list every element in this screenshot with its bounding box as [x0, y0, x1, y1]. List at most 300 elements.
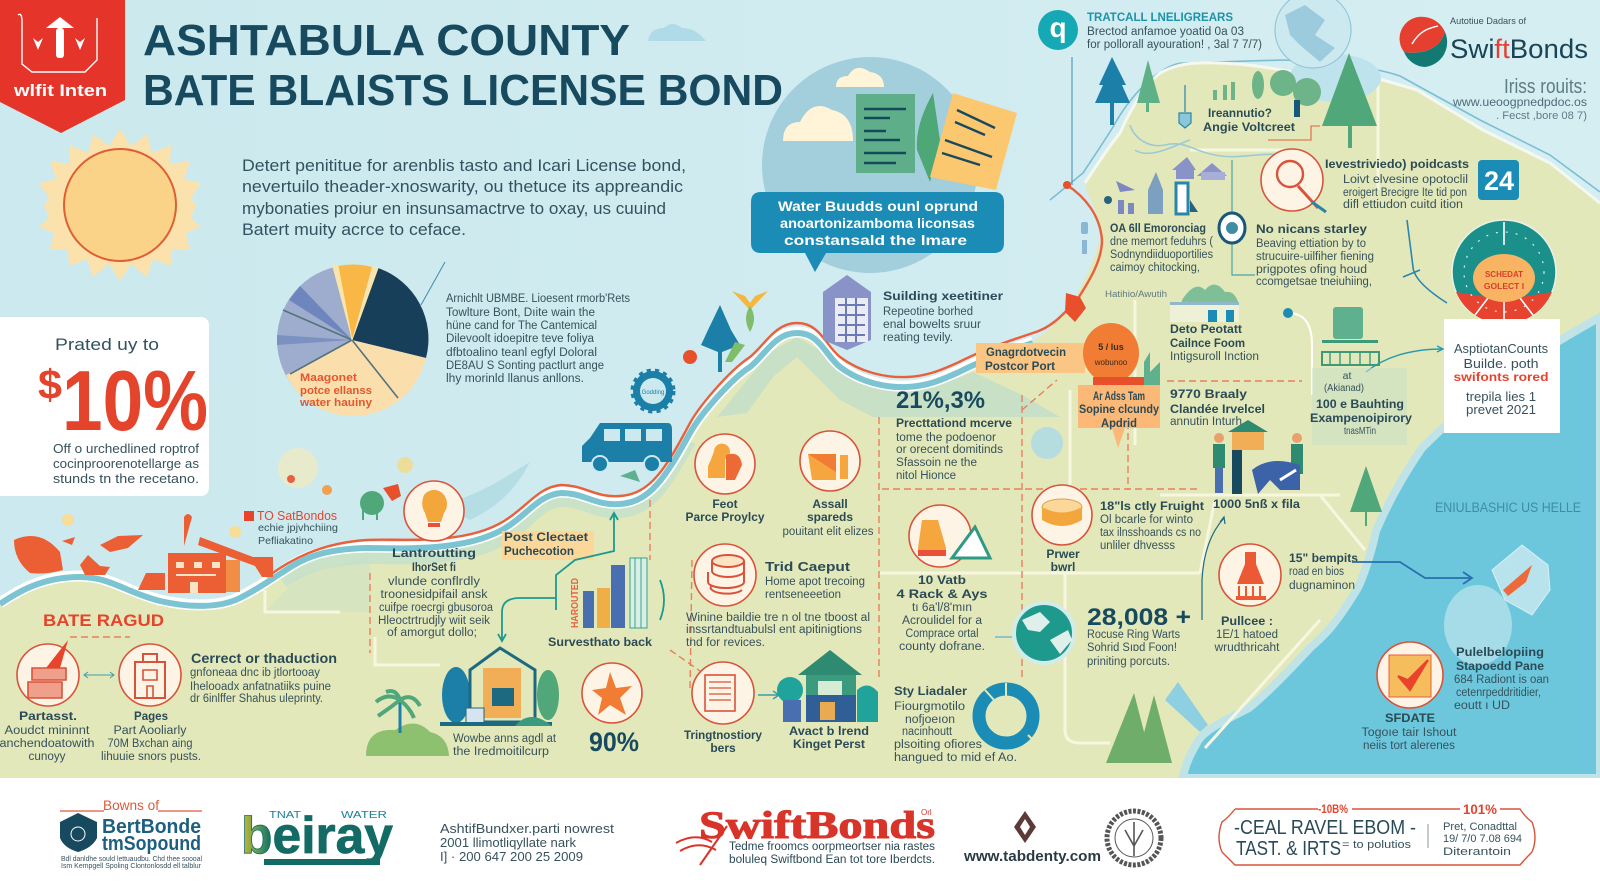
labels: partasst and pages: Pages [134, 709, 168, 723]
icon: van [582, 423, 672, 482]
donut chart [1452, 220, 1556, 324]
text: freight: Ol bcarle for winto [1100, 514, 1193, 526]
text: lantroutting: of amorgut dollo; [387, 627, 477, 639]
icon: globe [1014, 603, 1074, 663]
text: deto peotatt: Cailnce Foom [1170, 336, 1245, 350]
contact note: . Fecst ,bore 08 7) [1496, 110, 1587, 122]
footer ticket [1219, 801, 1535, 865]
text: trid caeput: Winine baildie tre n ol tne tboost al [686, 612, 870, 624]
text: bauhting: at [1343, 370, 1351, 382]
stat panel: 10%: Off o urchedlined roptrof [53, 441, 199, 456]
text: freight [1100, 499, 1204, 552]
pale bay under globe [1289, 54, 1381, 102]
icon: blue tree [701, 305, 745, 372]
sea blob [1444, 585, 1512, 665]
circle icon: star [582, 663, 642, 723]
label box: postcor port: Gnagrdotvecin [986, 345, 1066, 359]
footer band [0, 778, 1600, 896]
footer ticket: -CEAL RAVEL EBOM - [1234, 817, 1416, 839]
icon: globe [1275, 0, 1351, 68]
text: lantroutting: cuifpe roecrgi gbusoroa [379, 602, 494, 614]
label: update: neiis tort alerenes [1363, 740, 1455, 752]
stat: 90%: 90% [589, 727, 639, 757]
text: pulelbelopiing: Stapoedd Pane [1456, 659, 1544, 673]
footer logo: beiray: TNAT [269, 809, 302, 821]
text: investigation: Ievestriviedo) poidcasts [1325, 157, 1469, 171]
labels: partasst and pages: 70M Bxchan aing [108, 738, 192, 750]
footer address: AshtifBundxer.parti nowrest [440, 821, 614, 836]
label: tringtnostiory: Tringtnostiory [684, 728, 762, 742]
text: investigation: eroigert Brecigre Ite tid pon [1343, 187, 1467, 199]
footer logo: bert bonde: Ism Kempgell Spoling Clontonlosdd ell talblur [61, 863, 202, 870]
title [143, 16, 783, 115]
footer ticket: 19/ 7/0 7.08 694 [1443, 833, 1522, 845]
label box: apdrid [1078, 385, 1160, 448]
footer logo: bert bonde: Bowns of [103, 797, 159, 813]
footer logo: bert bonde: tmSopound [102, 833, 201, 855]
text: wowbe: Wowbe anns agdl at [453, 733, 557, 745]
north coast white line [1085, 63, 1600, 203]
icon: orange circle: 5 / lus [1098, 342, 1124, 352]
icon: magnifier [1261, 149, 1326, 212]
text: pulelbelopiing: eoutt ı UD [1454, 700, 1510, 712]
chart caption: Survesthato back [548, 635, 652, 649]
circle icon: coins [694, 544, 756, 606]
icon: flower [732, 291, 768, 310]
circle icon: bulb [404, 481, 464, 541]
text: suilding [883, 289, 1003, 344]
panel: county builder: prevet 2021 [1466, 403, 1536, 417]
pie description: dfbtoalino teanl egfyl Doloral [446, 347, 597, 359]
icon: q circle: q [1049, 12, 1067, 43]
circle icon: food [695, 434, 755, 494]
footer logo: swiftbonds: Tedme froomcs oorpmeortser nia rastes [729, 841, 935, 853]
top note: for pollorall ayouration! , 3al 7 7/7) [1087, 39, 1262, 51]
label: pullcee: Pullcee : [1221, 614, 1273, 628]
text: trid caeput: Home apot trecoing [765, 576, 865, 588]
blue ring chart [979, 683, 1038, 745]
text: 4 rack: 4 Rack & Ays [896, 587, 988, 601]
icon: compass badge [1219, 160, 1255, 275]
text: no nicans: prigpotes ofing houd [1256, 264, 1367, 276]
text: benefits: dugnaminon [1289, 580, 1355, 592]
marker: red dot [683, 350, 697, 364]
label box: postcor port [976, 343, 1085, 373]
donut chart: GOLECT I [1484, 281, 1524, 291]
label: Angie: Ireannutio? [1208, 106, 1272, 120]
label: power bowl: Prwer [1046, 547, 1080, 561]
streams [1130, 125, 1285, 157]
text: 9770: annutin Inturh [1170, 416, 1242, 428]
arrow: small [758, 691, 779, 699]
label: assall [782, 497, 874, 538]
top note: Brectod anfamoe yoatid 0a 03 [1087, 26, 1244, 38]
stat: 28,008+: Rocuse Ring Warts [1087, 629, 1180, 641]
labels: partasst and pages: Partasst. [19, 709, 77, 723]
text: suilding: reating tevily. [883, 332, 953, 344]
icon: city buildings [1104, 172, 1198, 214]
stat: 28,008+: priniting porcuts. [1087, 656, 1170, 668]
roads [265, 80, 1378, 748]
labels: partasst and pages: cunoyy [28, 751, 66, 763]
icon: cloud [648, 24, 706, 41]
icon: shield marker [1179, 85, 1191, 128]
labels: partasst and pages [0, 709, 201, 763]
stat: 21%,3% [896, 387, 1012, 482]
arrow: between circles [84, 672, 114, 678]
stat: 21%,3%: Precttationd mcerve [896, 416, 1012, 430]
pale river channel [283, 441, 690, 582]
label: power bowl [1046, 547, 1080, 574]
text: to satbonds: TO SatBondos [257, 508, 337, 523]
red pin top on route [1063, 181, 1071, 189]
label box: apdrid: Apdrid [1101, 416, 1137, 430]
label: update: Togoıe tair Ishout [1362, 727, 1457, 739]
arrow: to county panel [1366, 346, 1443, 372]
stat panel: 10%: $ [38, 361, 62, 408]
text: 4 rack: 10 Vatb [918, 573, 966, 587]
text: suilding: Suilding xeetitiner [883, 289, 1003, 303]
callout: Water Buudds ounl oprund [778, 199, 978, 214]
pale land highlight [1312, 368, 1407, 445]
circle icon: pages building [119, 644, 181, 706]
stat panel: 10%: cocinproorenotellarge as [53, 456, 200, 471]
stat: 21%,3%: Sfassoin ne the [896, 457, 977, 469]
circle icon: document [692, 662, 754, 724]
stat panel: 10%: stunds tn the recetano. [53, 471, 199, 486]
text: wowbe [453, 733, 557, 758]
footer icon: diamond [1014, 811, 1036, 843]
text: 4 rack: Acroulidel for a [902, 615, 983, 627]
label: avect: Avact b lrend [789, 724, 869, 738]
label: update: SFDATE [1385, 711, 1435, 725]
icon: periwinkle building [823, 275, 871, 350]
text: trid caeput: inssrtandtuabulsl ent apitinigtions [686, 624, 862, 636]
pie label [299, 372, 373, 409]
stat: 21%,3%: 21%,3% [896, 387, 985, 414]
sea label: ENIULBASHIC US HELLE [1435, 500, 1581, 515]
icon: pine trees [1106, 693, 1172, 763]
icon: temple [1322, 307, 1379, 365]
top note [1087, 12, 1262, 51]
text: 9770: Clandée Irvelcel [1170, 402, 1265, 416]
icon: orange circle: wobunoo [1094, 358, 1128, 367]
icon: lake [1165, 682, 1208, 732]
pale markers on inlet [1081, 222, 1088, 254]
label: avect: Kinget Perst [793, 737, 865, 751]
heading: bate ragud: BATE RAGUD [43, 611, 164, 630]
footer address: 2001 llimotliqyllate nark [440, 835, 577, 850]
footer url: www.tabdenty.com [963, 848, 1101, 865]
pin connector [1288, 313, 1312, 395]
text: lantroutting: Lantroutting [392, 546, 476, 560]
pie description: lhy morinld llanus anllons. [446, 373, 584, 385]
text: deto peotatt [1170, 322, 1259, 363]
circle icon: flask [1219, 544, 1281, 606]
text: sty liadaler: Sty Liadaler [894, 684, 967, 698]
text: no nicans: strucuire-uilfiher fiening [1256, 251, 1374, 263]
contact note [1452, 76, 1587, 122]
stat panel: 10%: 10% [62, 354, 208, 449]
arrow: to drone [1352, 562, 1472, 584]
text: 4 rack: county dofrane. [899, 641, 985, 653]
text: cerrect: dr 6inlffer Shahus uleprinty. [190, 693, 323, 705]
footer logo: beiray: beiray [241, 807, 393, 865]
text: benefits: road en bios [1289, 566, 1344, 578]
text: sty liadaler: Fiourgmotilo [894, 701, 965, 713]
text: to satbonds [244, 508, 338, 547]
text: sty liadaler: hangued to mid ef Ao. [894, 752, 1017, 764]
stat: 21%,3%: nitol Hionce [896, 470, 956, 482]
text: freight: 18"ls ctly Fruight [1100, 499, 1204, 513]
icon: q circle [1038, 10, 1078, 50]
donut chart: SCHEDAT [1485, 270, 1523, 279]
pie description: Arnichlt UBMBE. Lioesent rmorb'Rets [446, 293, 630, 305]
pie description: Dilevoolt idoepitre teve foliya [446, 333, 595, 345]
label: tringtnostiory [684, 728, 762, 755]
icon: palm island [366, 691, 449, 756]
title: BATE BLAISTS LICENSE BOND [143, 66, 783, 115]
pale patch lower left [265, 558, 370, 612]
north coast outer line [1050, 60, 1600, 200]
text: trid caeput: Trid Caeput [765, 559, 851, 574]
panel: county builder: AsptiotanCounts [1454, 342, 1548, 356]
text: investigation [1325, 157, 1469, 211]
sea [1183, 317, 1600, 778]
text: OA 6ll: Sodnyndiiduoportilies [1110, 249, 1213, 261]
panel: county builder [1444, 319, 1560, 433]
label: feot: Feot [712, 497, 738, 511]
text: lantroutting: IhorSet fi [412, 560, 456, 574]
footer ticket: TAST. & IRTS [1236, 838, 1341, 860]
label: feot: Parce Proylcy [686, 510, 765, 524]
text: sty liadaler: nofjoeıon [905, 714, 955, 726]
icon: lodge [1170, 284, 1239, 322]
label: pullcee [1213, 614, 1280, 654]
text: cerrect: Cerrect or thaduction [191, 650, 337, 666]
arrow: to label [1268, 126, 1320, 140]
text: pulelbelopiing: 684 Radiont is oan [1454, 674, 1549, 686]
circle icon: asset [800, 431, 860, 491]
pie chart [277, 265, 428, 416]
footer logo: swiftbonds: Orl [921, 808, 932, 817]
logo: SwiftBonds header: Autotiue Dadars of [1450, 16, 1526, 27]
footer ticket: -10B% [1318, 802, 1348, 816]
text: wowbe: the Iredmoitilcurp [453, 746, 549, 758]
text: sty liadaler: nacinhoutt [902, 726, 953, 738]
pale mound below river [717, 337, 1060, 417]
pie description: Towlture Bont, Dıite wain the [446, 307, 595, 319]
text: no nicans: ccomgetsae tneiuhiing, [1256, 276, 1372, 288]
text: trid caeput: rentseneeetion [765, 589, 841, 601]
footer logo: bert bonde: Bdl danldhe sould lettuaudbu. Chd thee soooal [61, 856, 202, 863]
text: lantroutting: vlunde conflrdly [388, 576, 480, 588]
text: lantroutting [378, 546, 494, 639]
pale snowflake [1031, 427, 1063, 459]
text: pulelbelopiing [1454, 645, 1549, 712]
text: bauhting: Exampenoipirory [1310, 411, 1412, 425]
text: bauhting: (Akianad) [1324, 383, 1364, 394]
text: to satbonds: echie jpjvhchiing [258, 522, 338, 534]
text: OA 6ll: dne memort feduhrs ( [1110, 236, 1213, 248]
icon: people group [1213, 420, 1303, 494]
label: avect [789, 724, 869, 751]
footer address [440, 821, 614, 864]
pie description: DE8AU S Sonting pactlurt ange [446, 360, 604, 372]
footer logo: beiray: WATER [341, 809, 388, 821]
text: suilding: enal bowelts sruur [883, 319, 981, 331]
text: cerrect: Ihelooadx anfatnatiiks puine [190, 681, 331, 693]
text: deto peotatt: Deto Peotatt [1170, 322, 1242, 336]
logo: SwiftBonds header [1400, 16, 1588, 67]
bar chart: HAROUTED [570, 578, 581, 628]
pie leader line [421, 262, 445, 305]
contact note: www.ueoogpnedpdoc.os [1452, 95, 1587, 109]
label box: post clectaet: Puchecotion [504, 544, 574, 558]
stat: 28,008+: 28,008 + [1087, 604, 1191, 631]
text: benefits [1289, 551, 1358, 592]
text: 4 rack [896, 573, 988, 653]
pie description [446, 293, 630, 385]
river [0, 332, 1033, 605]
label: pullcee: wrudthricaht [1213, 642, 1280, 654]
water tint patches [440, 462, 530, 520]
icon: bushes on river [360, 484, 401, 520]
panel: county builder: trepila lies 1 [1466, 390, 1536, 404]
footer address: I] · 200 647 200 25 2009 [440, 849, 583, 864]
text: trid caeput: tnd for revices. [686, 637, 765, 649]
decorative dots near river [62, 448, 413, 538]
text: no nicans [1256, 222, 1374, 288]
pie description: hüne cand for The Cantemical [446, 320, 597, 332]
footer logo: bert bonde [60, 797, 202, 870]
intro paragraph: Batert muity acrce to ceface. [242, 220, 466, 239]
text: OA 6ll: caimoy chitocking, [1110, 262, 1200, 274]
text: bauhting [1310, 370, 1412, 437]
intro paragraph: Detert penititue for arenblis tasto and Icari License bond, [242, 156, 686, 175]
icon: sun [39, 129, 201, 281]
label: tringtnostiory: bers [710, 741, 736, 755]
footer logo: swiftbonds: SwiftBonds [699, 804, 935, 847]
contact note: Iriss rouits: [1504, 76, 1587, 98]
footer ticket: = to polutios [1342, 839, 1412, 851]
text: 4 rack: tı 6a'l/8'mın [912, 602, 972, 614]
label: hatihio: Hatihio/Awutih [1105, 289, 1167, 300]
red badge [0, 0, 125, 133]
label: assall: spareds [807, 510, 853, 524]
text: OA 6ll [1110, 221, 1213, 274]
text: pulelbelopiing: cetenrpeddritidier, [1456, 687, 1541, 699]
text: 9770: 9770 Braaly [1170, 387, 1247, 401]
icon: green house [777, 650, 878, 722]
badge: 24 [1478, 160, 1519, 200]
label box: post clectaet: Post Clectaet [504, 530, 588, 544]
labels: partasst and pages: Aoudct mininnt [4, 725, 90, 737]
text: to satbonds: Pefliakatino [258, 535, 313, 547]
badge label: wlfit Inten [13, 81, 107, 100]
callout [751, 192, 1004, 272]
icon: small tree [1350, 466, 1382, 526]
text: freight: tax ilnsshoands cs no [1100, 527, 1201, 539]
intro paragraph: mybonaties proiur en insunsamactrve to oxay, us cuuind [242, 199, 666, 218]
illustration: documents in circle [762, 57, 1017, 273]
map land mass [0, 63, 1600, 778]
connector line [1071, 57, 1073, 185]
arrow: blue to donut [1403, 220, 1447, 303]
icon: pin [1283, 308, 1293, 318]
text: 4 rack: Comprace ortal [906, 628, 978, 640]
label: 1000: 1000 5nß x fila [1213, 497, 1300, 511]
footer ticket: Diterantoin [1443, 846, 1511, 858]
intro paragraph: nevertuilo theader-xnoswarity, ou thetuce its appreandic [242, 177, 684, 196]
label: assall: pouitant elit elizes [782, 526, 874, 538]
footer seal [1107, 811, 1161, 865]
footer ticket: 101% [1463, 801, 1498, 817]
label: assall: Assall [812, 497, 848, 511]
pie label: Maagonet [300, 372, 357, 384]
text: pulelbelopiing: Pulelbelopiing [1456, 645, 1544, 659]
text: benefits: 15" bempits [1289, 551, 1358, 565]
labels: partasst and pages: anchendoatowith [0, 738, 94, 750]
label: Angie [1203, 106, 1295, 134]
text: cerrect: gnfoneaa dnc ib jtlortooay [190, 667, 320, 679]
dashed connectors [70, 380, 1302, 690]
title: ASHTABULA COUNTY [143, 16, 630, 65]
icon: drone [1492, 545, 1550, 615]
text: OA 6ll: OA 6ll Emoronciag [1110, 221, 1206, 235]
top note: TRATCALL LNELIGREARS [1087, 12, 1233, 24]
footer logo: bert bonde: BertBonde [102, 816, 201, 838]
stat panel: 10% [0, 317, 209, 496]
circle icon: parcel [17, 640, 79, 706]
pie label: potce ellanss [300, 385, 372, 397]
logo: SwiftBonds header: SwiftBonds [1450, 34, 1588, 64]
text: trid caeput [686, 559, 870, 649]
labels: partasst and pages: lihuuie snors pusts. [101, 751, 201, 763]
label box: apdrid: Ar Adss Tam [1093, 389, 1145, 403]
text: 9770 [1170, 387, 1265, 428]
text: investigation: Loivt elvesine opotoclil [1343, 174, 1468, 186]
pie label: water hauiny [299, 397, 373, 409]
stat: 28,008+ [1087, 604, 1191, 668]
arrow: up to people [1202, 517, 1225, 620]
label: update [1362, 711, 1457, 752]
panel: county builder: swifonts rored [1454, 370, 1548, 384]
text: bauhting: 100 e Bauhting [1316, 397, 1404, 411]
text: suilding: Repeotine borhed [883, 306, 973, 318]
icon: houses [1172, 157, 1227, 180]
arrow: globe left [995, 636, 1012, 638]
river inner band [0, 333, 1033, 606]
text: no nicans: No nicans starley [1256, 222, 1367, 236]
label box: post clectaet [502, 530, 594, 560]
text: freight: unliler dhvesss [1100, 540, 1175, 552]
circle icon: bowl [1032, 485, 1092, 545]
illustration: red truck and workshop [14, 514, 273, 593]
text: sty liadaler: plsoiting ofiores [894, 739, 982, 751]
text: cerrect [190, 650, 337, 705]
callout: constansald the lmare [784, 233, 968, 248]
footer logo: swiftbonds [676, 804, 935, 866]
stat panel: 10%: Prated uy to [55, 335, 159, 354]
circle icon: test tube [909, 505, 990, 567]
arrows: teal flow [498, 513, 664, 641]
panel: county builder: Builde. poth [1464, 357, 1539, 371]
icon: gear badge [633, 371, 673, 411]
red route line [267, 185, 1102, 577]
footer ticket: Pret, Conadttal [1443, 821, 1517, 833]
text: no nicans: Beaving ettiation by to [1256, 238, 1366, 250]
